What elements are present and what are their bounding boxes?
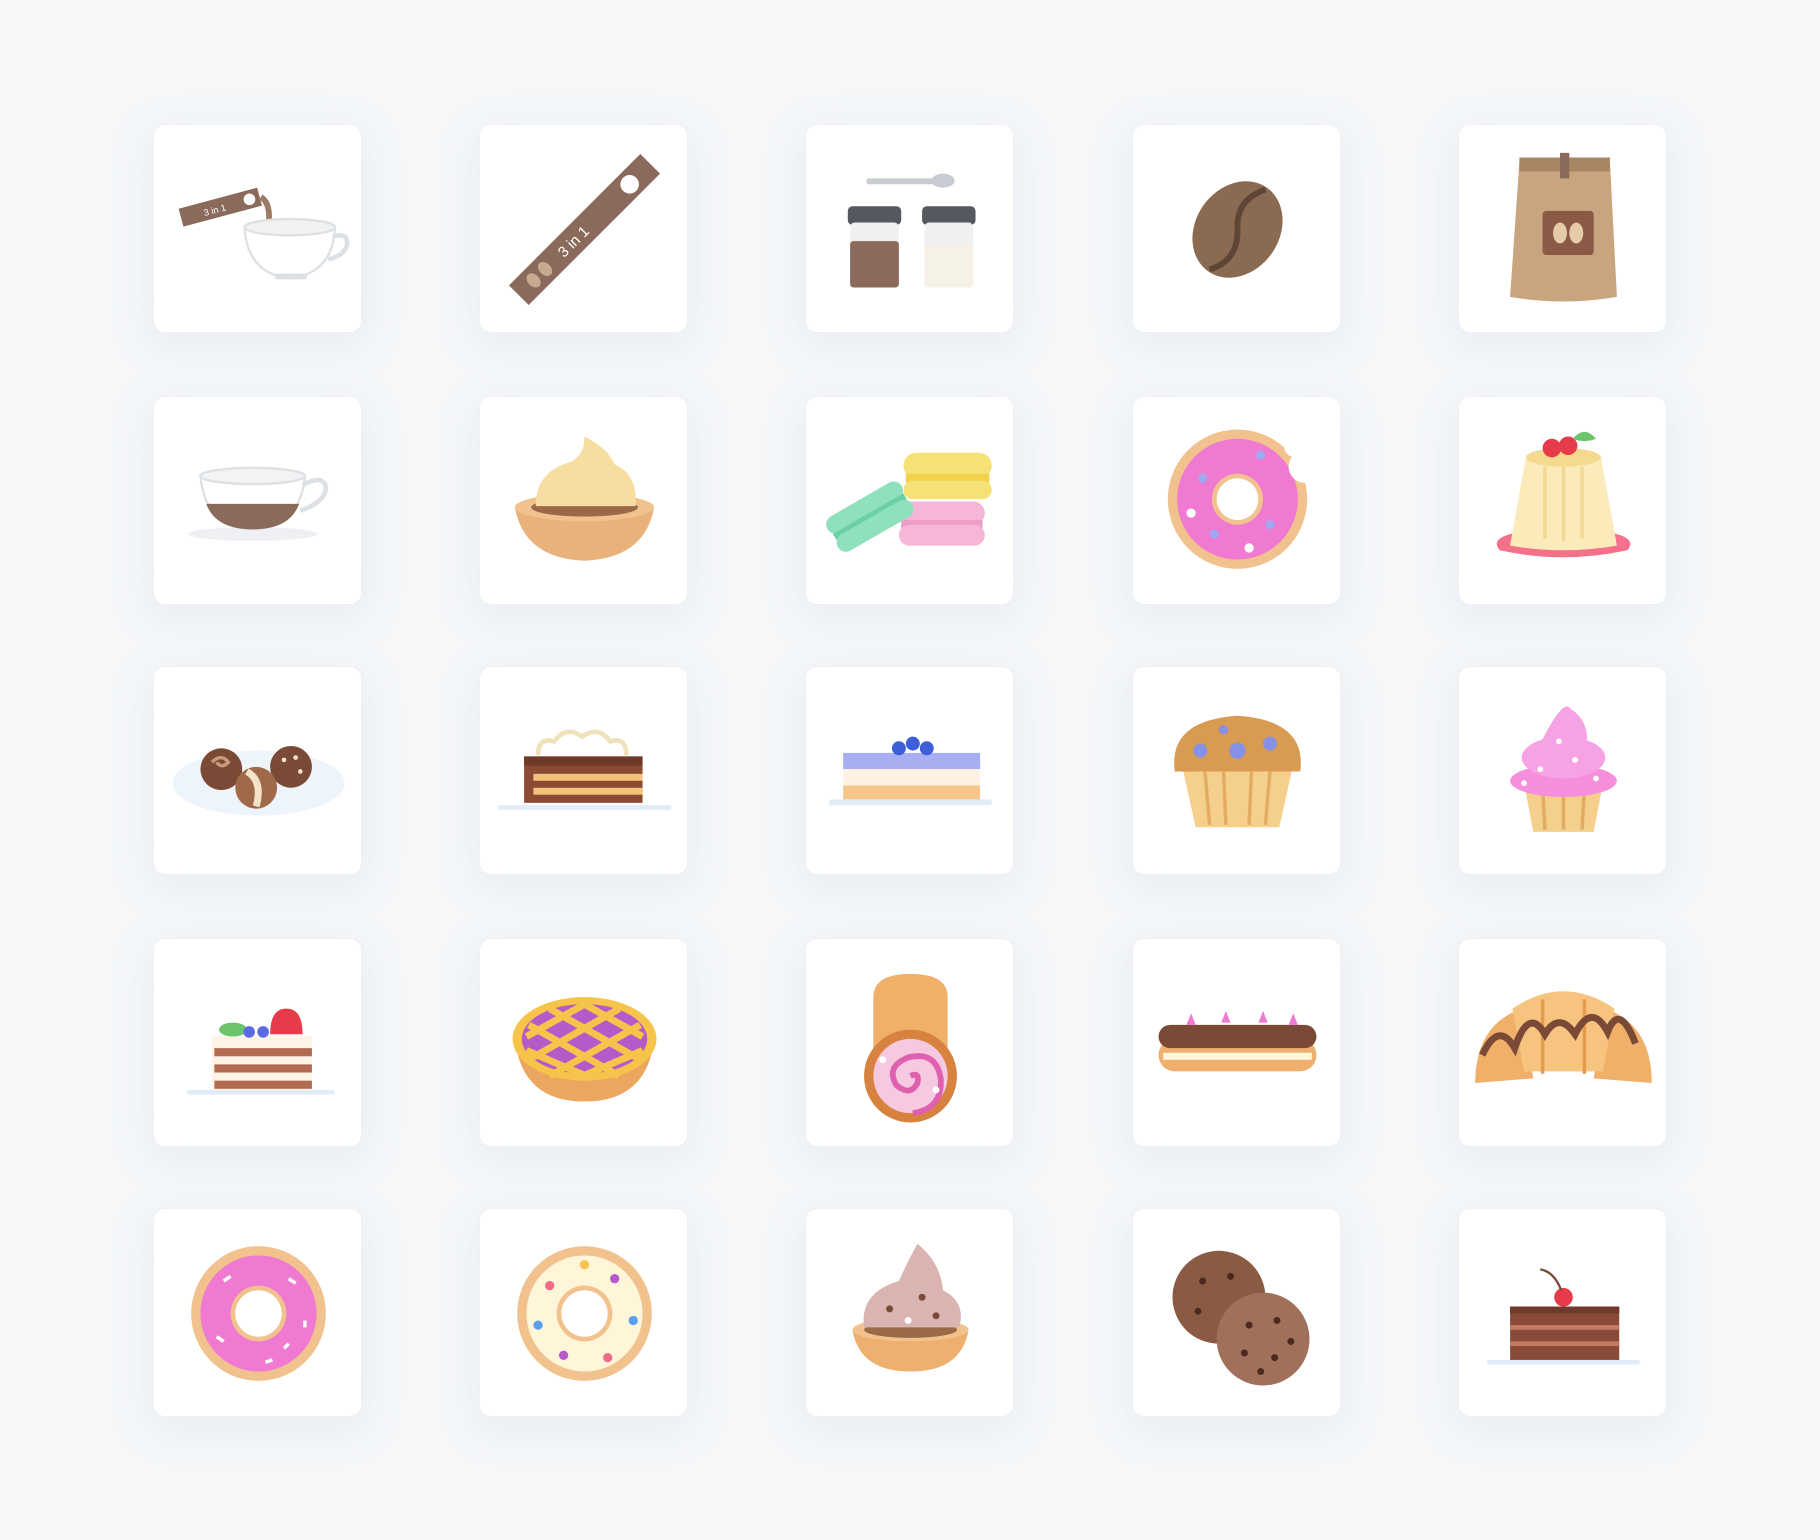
icon: pink donut bbox=[191, 1246, 326, 1381]
card: swiss roll bbox=[805, 938, 1014, 1147]
card: cupcake bbox=[1458, 666, 1667, 875]
card: muffin bbox=[1132, 666, 1341, 875]
icon: bag bbox=[1510, 153, 1617, 301]
icon: croissant bbox=[1475, 991, 1652, 1083]
icon: eclair bbox=[1159, 1011, 1316, 1071]
icon: sprinkle donut bbox=[517, 1246, 652, 1381]
icon: cup on saucer bbox=[188, 468, 326, 541]
card: 3in1 pouring into cup bbox=[153, 124, 362, 333]
icon: cupcake bbox=[1510, 706, 1617, 832]
card: coffee cup bbox=[153, 396, 362, 605]
card: pie bbox=[479, 938, 688, 1147]
card: pink donut bbox=[153, 1208, 362, 1417]
icon: donut bitten bbox=[1168, 430, 1321, 569]
icon: fruit layer cake bbox=[187, 1009, 335, 1095]
card: layered fruit cake bbox=[153, 938, 362, 1147]
card: truffles bbox=[153, 666, 362, 875]
icon: truffles plate bbox=[173, 746, 344, 816]
card: croissant bbox=[1458, 938, 1667, 1147]
icon: tart bbox=[515, 436, 654, 561]
card: coffee bag bbox=[1458, 124, 1667, 333]
card: white donut bbox=[479, 1208, 688, 1417]
icon: bean bbox=[1174, 164, 1301, 295]
card: coffee bean bbox=[1132, 124, 1341, 333]
icon: stick bbox=[509, 154, 660, 305]
icon: muffin bbox=[1174, 716, 1301, 827]
card: chocolate cake bbox=[1458, 1208, 1667, 1417]
card: 3in1 stick bbox=[479, 124, 688, 333]
card: eclair bbox=[1132, 938, 1341, 1147]
icon: pudding bbox=[1497, 432, 1630, 557]
icon: sachet pouring bbox=[179, 188, 347, 279]
icon: lattice pie bbox=[513, 997, 656, 1102]
card: cream tart bbox=[479, 396, 688, 605]
card: macarons bbox=[805, 396, 1014, 605]
card: mousse tart bbox=[805, 1208, 1014, 1417]
icon: cake slice bbox=[497, 732, 672, 810]
icon: sachet pouring: 3 in 1 bbox=[203, 203, 227, 218]
icon: roll cake bbox=[864, 974, 957, 1122]
icon: jars and spoon bbox=[848, 174, 976, 288]
card: cookies bbox=[1132, 1208, 1341, 1417]
icon: macarons bbox=[823, 453, 992, 555]
icon: cookies bbox=[1172, 1251, 1309, 1385]
icon: stick: 3 in 1 bbox=[555, 223, 593, 261]
card: jars bbox=[805, 124, 1014, 333]
card: cake slice bbox=[479, 666, 688, 875]
icon: mousse tart bbox=[852, 1244, 969, 1372]
icon: chocolate cake with cherry bbox=[1487, 1269, 1640, 1365]
card: blueberry slice bbox=[805, 666, 1014, 875]
card: pudding bbox=[1458, 396, 1667, 605]
icon: blueberry cake bbox=[829, 737, 992, 805]
card: bitten donut bbox=[1132, 396, 1341, 605]
